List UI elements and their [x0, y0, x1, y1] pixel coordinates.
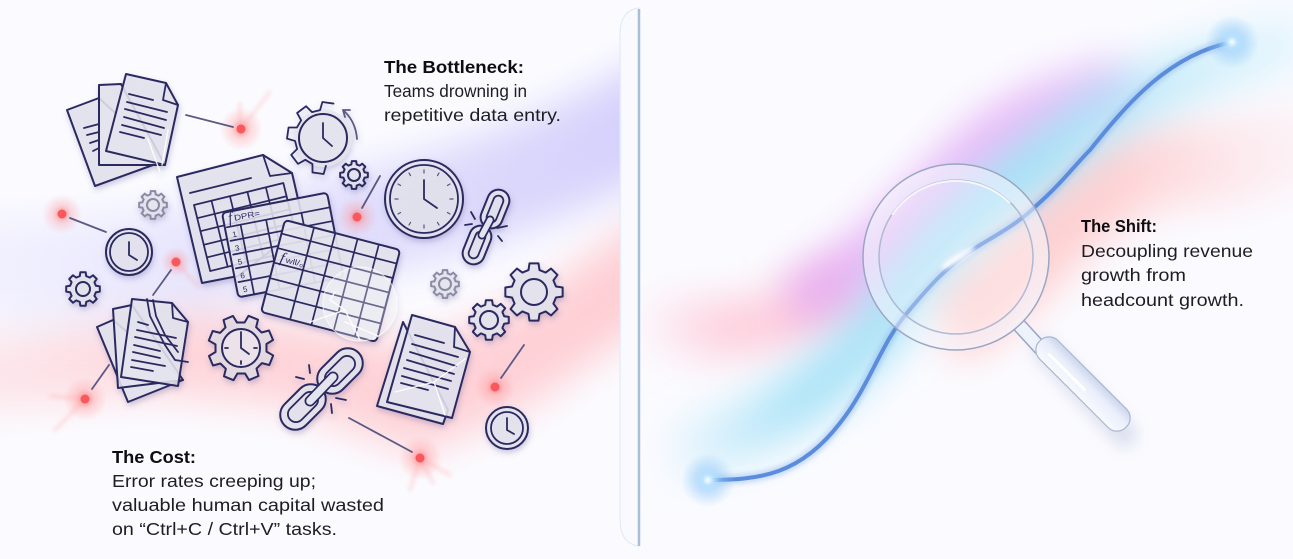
- icon: magnifying glass: [863, 164, 1135, 436]
- icon: spreadsheet document back: [177, 155, 304, 283]
- icon: spreadsheet middle: [222, 192, 343, 297]
- icon: broken chain bottom: [274, 342, 369, 436]
- heading: the shift: growth from: [1081, 265, 1186, 285]
- marker: bottom alert: [349, 418, 450, 490]
- icon: small gear top: [340, 161, 368, 189]
- icon: torn document stack: [97, 299, 188, 402]
- heading: the shift: headcount growth.: [1081, 290, 1244, 310]
- icon: spreadsheet middle: 3: [234, 243, 241, 253]
- heading: the cost: The Cost:: [112, 447, 196, 467]
- icon: small clock lower right: [486, 407, 528, 449]
- chart: growth curve: [681, 15, 1259, 507]
- icon: spreadsheet front with glass crack: f: [278, 250, 288, 267]
- heading: the shift: The Shift:: [1081, 216, 1157, 236]
- handle grip: [1031, 332, 1135, 436]
- icon: document stack lower right: [377, 315, 470, 424]
- marker: mid left alert: [153, 247, 198, 295]
- icon: pale gear right: [431, 270, 459, 298]
- handle neck: [1019, 325, 1041, 349]
- heading: the cost: Error rates creeping up;: [112, 471, 316, 491]
- marker: right alert: [475, 345, 524, 407]
- icon: spreadsheet middle: 5: [237, 257, 243, 267]
- heading: the cost: [112, 447, 384, 539]
- icon: gear with clock and arrow: [283, 98, 357, 174]
- left colour wash: [0, 100, 680, 455]
- icon: spreadsheet middle: 1: [232, 230, 238, 239]
- marker: centre alert: [337, 176, 380, 237]
- marker: documents alert: [186, 92, 270, 151]
- heading: the shift: [1081, 216, 1253, 310]
- icon: small clock left: [106, 229, 152, 275]
- marker: lower left alert: [50, 365, 109, 430]
- lens ring: [871, 172, 1041, 342]
- icon: gear with clock centre: [199, 306, 283, 390]
- icon: spreadsheet front with glass crack: [261, 220, 400, 342]
- glow: curve start: [681, 453, 735, 507]
- glow: curve end: [1205, 15, 1259, 69]
- lens highlight: [939, 244, 977, 272]
- handle shadow: [1045, 350, 1125, 435]
- heading: the bottleneck: repetitive data entry.: [384, 105, 561, 125]
- icon: medium gear right: [469, 300, 509, 340]
- icon: broken chain top: [459, 186, 513, 268]
- marker: left alert: [25, 194, 106, 234]
- heading: the bottleneck: [384, 57, 561, 125]
- icon: large gear right: [505, 263, 563, 321]
- icon: spreadsheet middle: 5: [242, 285, 249, 294]
- heading: the shift: Decoupling revenue: [1081, 241, 1253, 261]
- icon: spreadsheet front with glass crack: wll/₀: [284, 255, 304, 269]
- icon: spreadsheet middle: DPR=: [233, 209, 261, 223]
- icon: document stack top left: [67, 74, 178, 186]
- icon: spreadsheet middle: f: [227, 210, 236, 227]
- right colour wash: [640, 38, 1293, 455]
- icon: large wall clock: [385, 160, 463, 238]
- heading: the cost: valuable human capital wasted: [112, 495, 384, 515]
- heading: the bottleneck: Teams drowning in: [384, 81, 527, 101]
- heading: the cost: on “Ctrl+C / Ctrl+V” tasks.: [112, 519, 337, 539]
- heading: the bottleneck: The Bottleneck:: [384, 57, 524, 77]
- panel: the bottleneck icons: [66, 74, 563, 449]
- icon: pale gear left: [139, 191, 167, 219]
- callout markers: red alert dots with leaders: [25, 92, 524, 490]
- divider: glass panel: [620, 8, 639, 546]
- icon: gear lower left: [66, 272, 100, 306]
- icon: spreadsheet middle: 6: [240, 271, 246, 281]
